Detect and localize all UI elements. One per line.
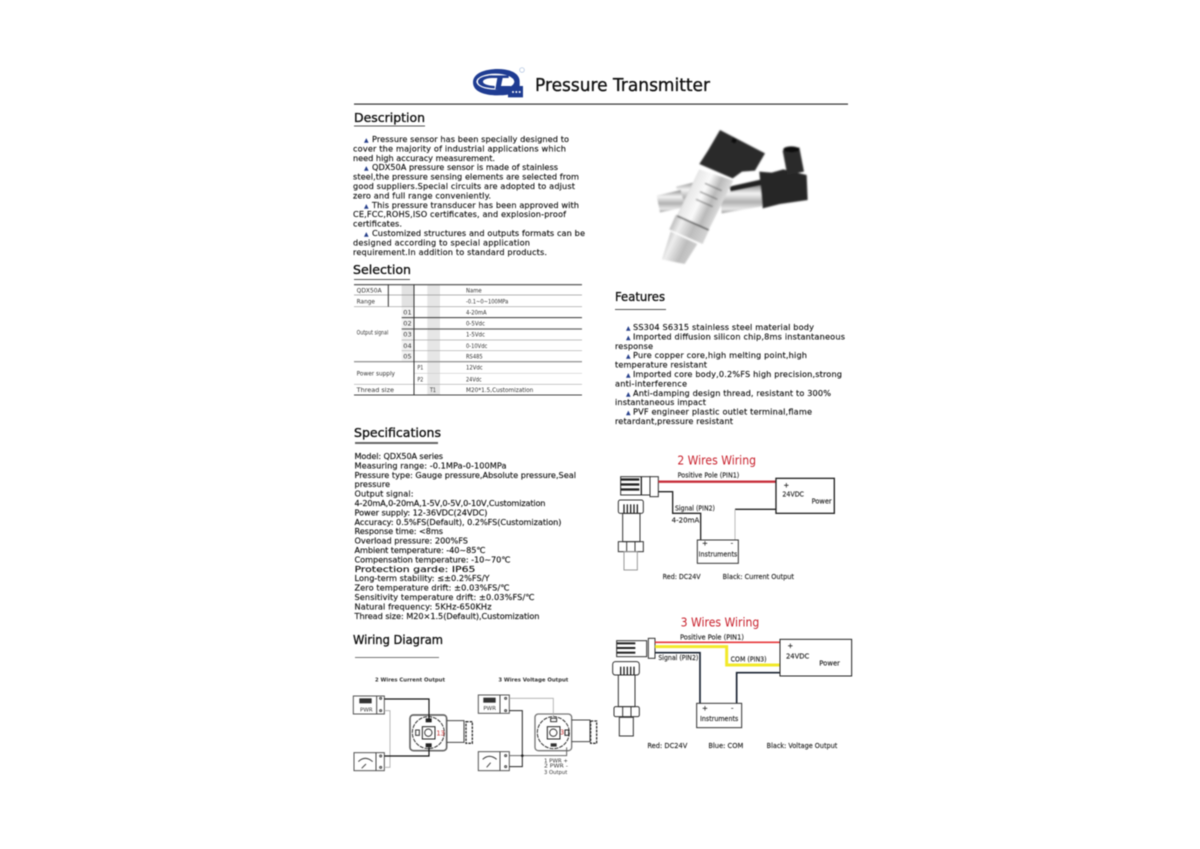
wiring diagram: 3 wires voltage output: 3 Wires Voltage Output (498, 678, 569, 684)
text block: description: zero and full range conveniently. (353, 190, 491, 200)
wiring chart: 3 wires: Blue: COM (708, 742, 743, 750)
text block: description: designed according to special application (353, 237, 530, 247)
text block: description: QDX50A pressure sensor is made of stainless (372, 162, 558, 172)
selection table: 1-5Vdc (466, 332, 485, 339)
heading: features (615, 289, 666, 310)
back sensor body (720, 185, 764, 213)
wiring chart: 3 wires: Instruments (700, 715, 739, 723)
heading: selection: Selection (353, 262, 411, 277)
text block: features: Imported diffusion silicon chip,8ms instantaneous (633, 331, 845, 341)
text block: specifications: Long-term stability: ≤±0.2%FS/Y (354, 573, 490, 583)
wiring chart: 2 wires: + (702, 540, 708, 548)
front sensor body (677, 169, 733, 230)
selection table: 0-10Vdc (466, 343, 488, 350)
text block: description (353, 134, 585, 257)
text block: features: response (615, 341, 653, 351)
text block: description: Customized structures and outputs formats can be (372, 228, 585, 238)
text block: specifications: Pressure type: Gauge pressure,Absolute pressure,Seal (354, 470, 576, 480)
text block: specifications: Thread size: M20×1.5(Default),Customization (354, 611, 540, 621)
wiring chart: 2 wires: Red: DC24V (663, 573, 701, 581)
selection table: 03 (403, 332, 412, 339)
selection table: M20*1.5,Customization (466, 387, 533, 394)
chart title: 3 Wires Wiring (681, 616, 759, 630)
text block: specifications: Accuracy: 0.5%FS(Default), 0.2%FS(Customization) (354, 517, 562, 527)
selection table: T1 (429, 387, 436, 394)
text block: specifications: Output signal: (354, 489, 414, 499)
heading: wiring diagram: Wiring Diagram (353, 632, 443, 647)
selection table: -0.1~0~100MPa (466, 299, 508, 306)
selection table: 04 (403, 343, 412, 350)
wiring chart: 3 wires: Black: Voltage Output (767, 742, 838, 750)
text block: specifications (354, 451, 576, 621)
text block: description: good suppliers.Special circuits are adopted to adjust (353, 181, 576, 191)
text block: specifications: Ambient temperature: -40~85℃ (354, 545, 486, 555)
text block: description: ▲ (364, 137, 369, 144)
text block: description: need high accuracy measurement. (353, 153, 495, 163)
header rule (354, 104, 848, 105)
wiring chart: 2 wires: Positive Pole (PIN1) (678, 472, 740, 480)
text block: description: certificates. (353, 219, 402, 229)
text block: specifications: Zero temperature drift: ±0.03%FS/℃ (354, 583, 510, 593)
wiring diagram: 3 wires voltage output: PWR (483, 706, 496, 712)
heading: wiring diagram (353, 632, 443, 658)
text block: specifications: Power supply: 12-36VDC(24VDC) (354, 507, 488, 517)
wiring chart: 2 wires: + (783, 482, 789, 490)
wiring chart: 3 wires: + (787, 642, 793, 650)
text block: specifications: Response time: <8ms (354, 526, 443, 536)
text block: specifications: 4-20mA,0-20mA,1-5V,0-5V,0-10V,Customization (354, 498, 546, 508)
wiring diagram: 2 wires current output (353, 678, 472, 771)
wiring chart: 3 wires: Signal (PIN2) (658, 654, 699, 662)
wiring chart: 3 wires: COM (PIN3) (731, 655, 767, 663)
text block: features: Pure copper core,high melting point,high (633, 350, 807, 360)
wiring diagram: 2 wires current output: 13 (436, 729, 445, 737)
wiring diagram: 2 wires current output: PWR (360, 707, 373, 713)
wiring chart: 3 wires: + (702, 705, 708, 713)
title: Pressure Transmitter (535, 75, 711, 96)
selection table (354, 285, 582, 395)
text block: description: CE,FCC,ROHS,ISO certificates, and explosion-proof (353, 209, 567, 219)
text block: features: ▲ (626, 391, 631, 398)
selection table: 05 (403, 354, 412, 361)
text block: description: ▲ (364, 203, 369, 210)
selection table: RS485 (466, 354, 483, 361)
wiring diagram: 3 wires voltage output: 3 Output (544, 770, 568, 776)
text block: description: steel,the pressure sensing elements are selected from (353, 172, 579, 182)
heading: specifications: Specifications (354, 425, 441, 440)
text block: features (615, 322, 845, 426)
wiring diagram: 2 wires current output: 2 Wires Current Output (375, 678, 445, 684)
selection table: 0-5Vdc (466, 320, 485, 327)
text block: features: Imported core body,0.2%FS high precision,strong (633, 369, 842, 379)
text block: features: anti-interference (615, 378, 687, 388)
heading: features: Features (615, 289, 665, 304)
text block: description: ▲ (364, 165, 369, 172)
wiring chart: 2 wires: 4-20mA (672, 516, 700, 524)
wiring diagram: 3 wires voltage output (478, 678, 597, 776)
logo (473, 68, 524, 97)
wiring diagram: 3 wires voltage output: 2 PWR - (544, 764, 568, 770)
text block: features: ▲ (626, 334, 631, 341)
text block: specifications: Sensitivity temperature drift: ±0.03%FS/℃ (354, 592, 534, 602)
text block: specifications: Natural frequency: 5KHz-650KHz (354, 601, 492, 611)
wiring chart: 2 wires: - (731, 540, 734, 548)
heading: description: Description (354, 110, 425, 125)
wiring diagram: 3 wires voltage output: 3 (560, 729, 564, 737)
text block: features: temperature resistant (615, 360, 708, 370)
wiring diagram: 3 wires voltage output: 1 PWR + (544, 758, 568, 764)
selection table: QDX50A (357, 288, 382, 295)
text block: specifications: pressure (354, 479, 390, 489)
wiring chart: 3 wires: - (731, 705, 734, 713)
selection table: 24Vdc (466, 376, 482, 383)
wiring chart: 2 wires (618, 453, 834, 581)
text block: features: PVF engineer plastic outlet terminal,flame (633, 407, 812, 417)
selection table: Range (357, 299, 375, 306)
selection table: 02 (403, 320, 412, 327)
text block: features: instantaneous impact (615, 397, 707, 407)
text block: specifications: Overload pressure: 200%FS (354, 536, 468, 546)
wiring chart: 3 wires (613, 616, 852, 750)
text block: specifications: Measuring range: -0.1MPa-0-100MPa (354, 460, 506, 470)
selection table: P2 (417, 376, 423, 383)
selection table: 01 (403, 310, 412, 317)
wiring chart: 2 wires: Black: Current Output (723, 573, 794, 581)
selection table: Power supply (357, 370, 395, 377)
selection table: 12Vdc (466, 365, 483, 372)
text block: specifications: Compensation temperature: -10~70℃ (354, 554, 510, 564)
wiring chart: 2 wires: Signal (PIN2) (675, 505, 715, 513)
chart title: 2 Wires Wiring (677, 453, 756, 467)
text block: features: SS304 S6315 stainless steel material body (633, 322, 814, 332)
text block: description: requirement.In addition to standard products. (353, 247, 547, 257)
text block: specifications: Model: QDX50A series (354, 451, 443, 461)
wiring chart: 3 wires: Power (819, 659, 840, 667)
selection table: Thread size (356, 387, 394, 394)
text block: features: ▲ (626, 410, 631, 417)
product photo (657, 130, 808, 264)
wiring chart: 2 wires: Instruments (699, 551, 738, 559)
wiring chart: 3 wires: Red: DC24V (647, 742, 688, 750)
text block: description: This pressure transducer has been approved with (371, 200, 579, 210)
wiring chart: 2 wires: Power (812, 498, 832, 506)
selection table: 4-20mA (466, 310, 487, 317)
text block: description: Pressure sensor has been specially designed to (372, 134, 569, 144)
text block: description: ▲ (364, 231, 369, 238)
text block: features: ▲ (626, 325, 631, 332)
wiring chart: 3 wires: Positive Pole (PIN1) (680, 633, 744, 641)
selection table: P1 (417, 365, 423, 372)
text block: description: cover the majority of industrial applications which (353, 143, 566, 153)
wiring chart: 2 wires: 24VDC (782, 490, 804, 498)
wiring chart: 3 wires: 24VDC (786, 653, 809, 661)
text block: features: ▲ (626, 372, 631, 379)
text block: features: ▲ (626, 353, 631, 360)
text block: features: Anti-damping design thread, resistant to 300% (633, 388, 831, 398)
text block: features: retardant,pressure resistant (615, 416, 734, 426)
selection table: Output signal (357, 330, 389, 337)
text block: specifications: Protection garde: IP65 (354, 564, 476, 574)
selection table: Name (466, 288, 482, 295)
